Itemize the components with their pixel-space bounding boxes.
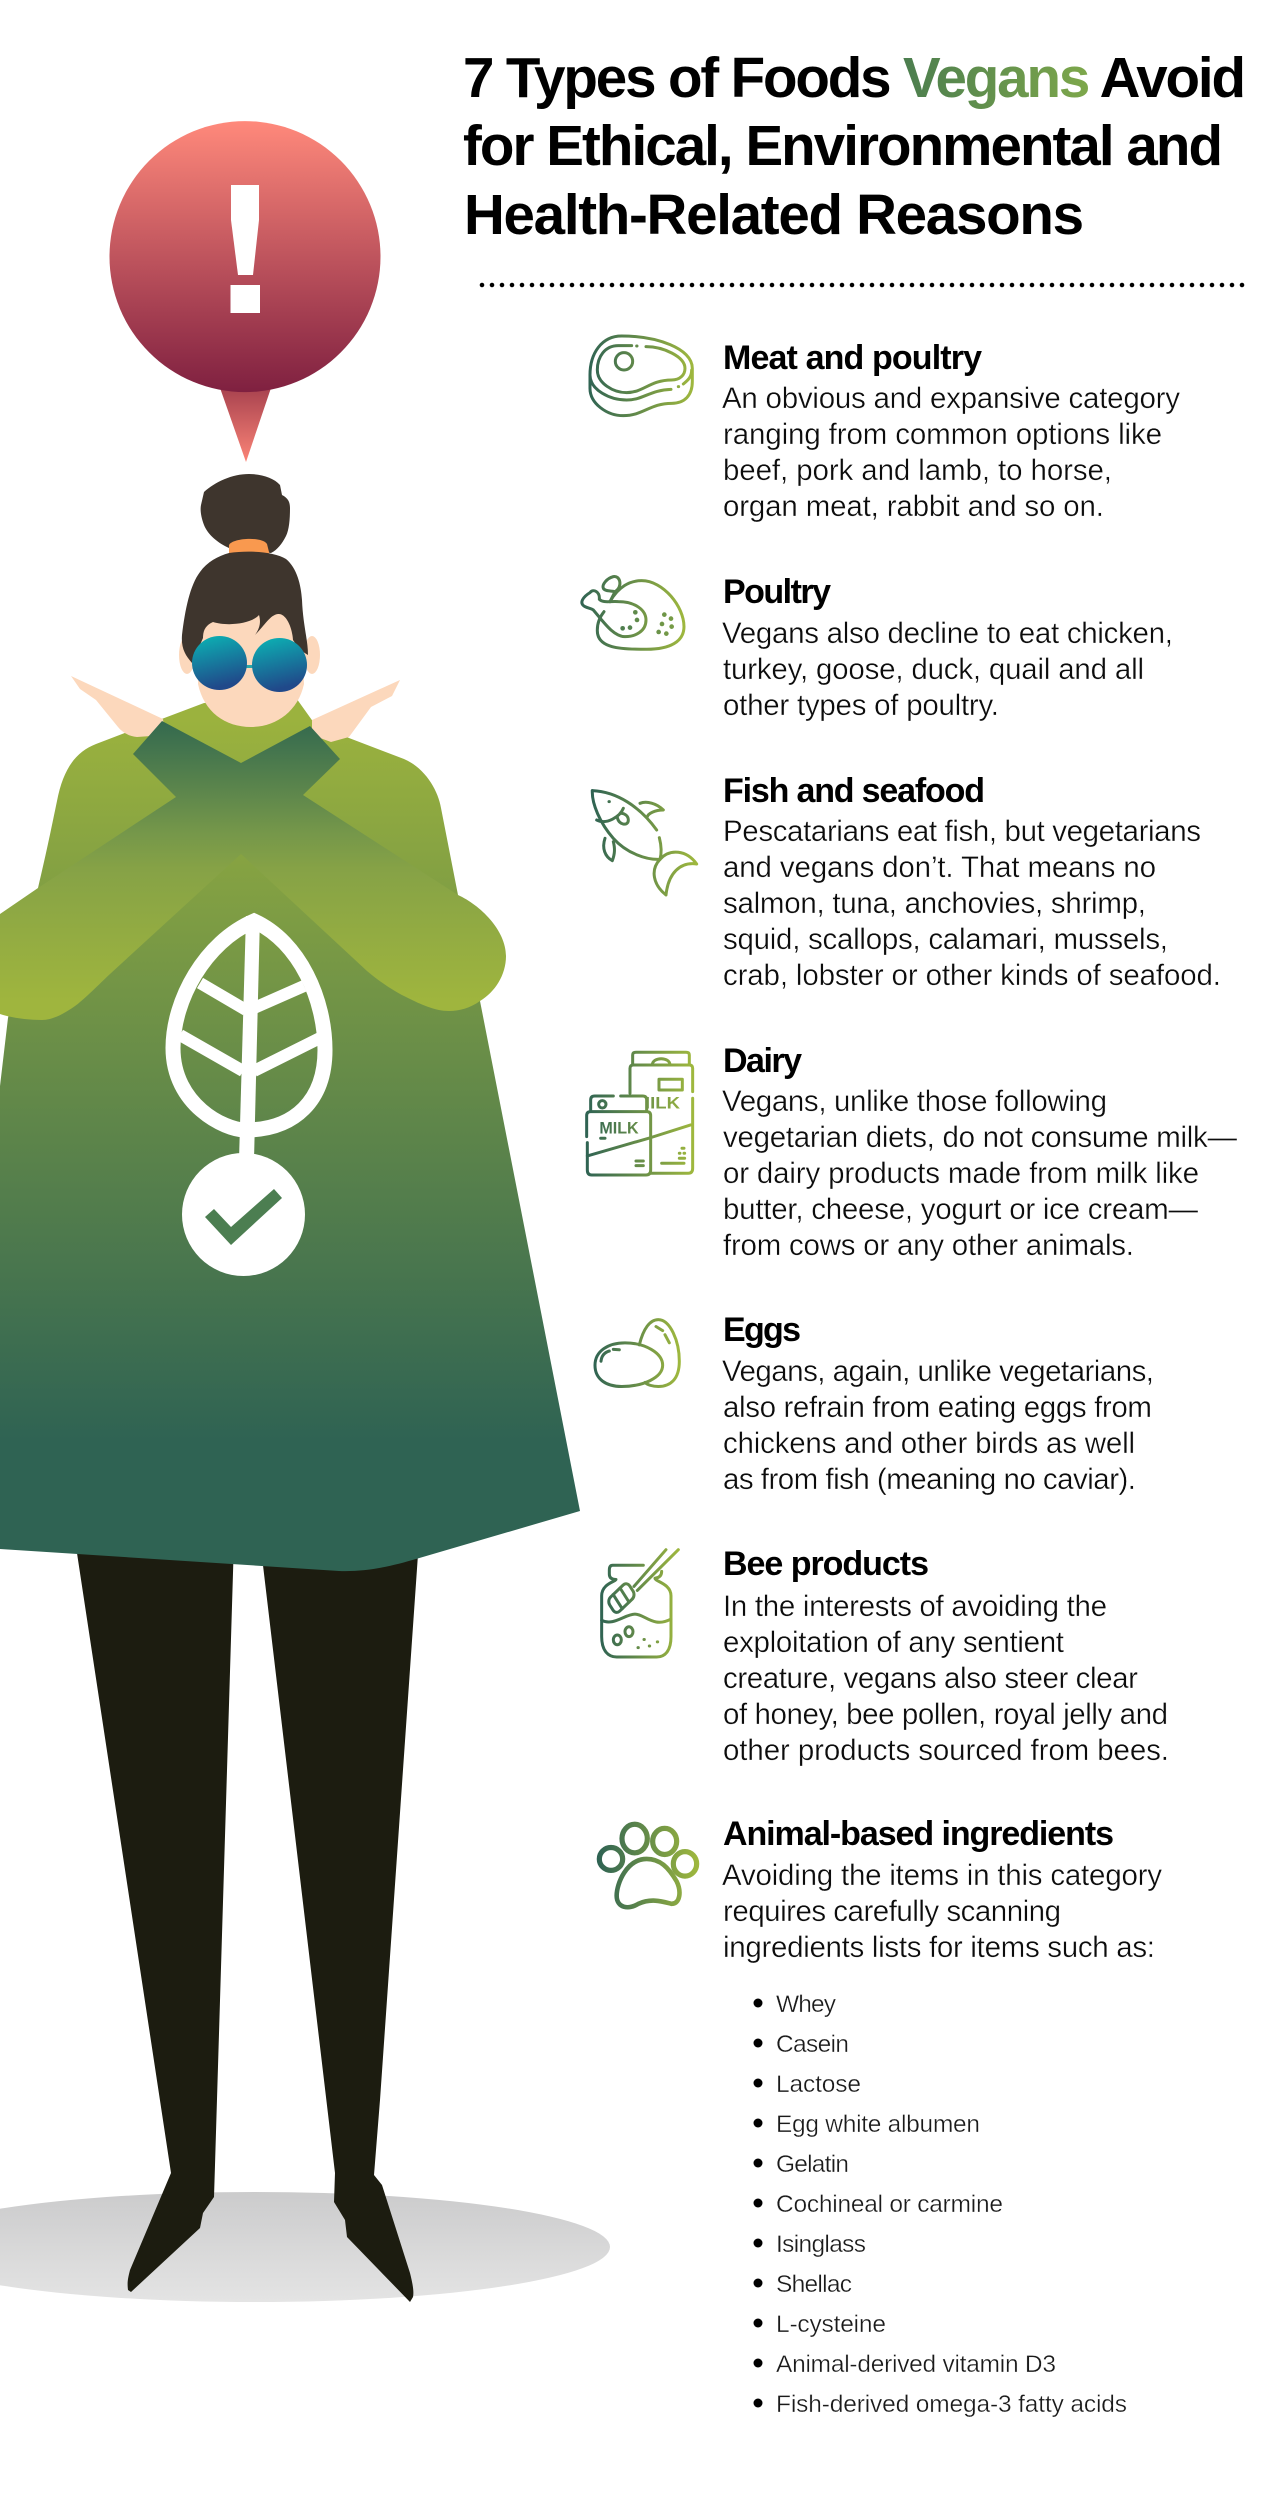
title [463,46,1246,246]
ingredients list: Shellac [776,2271,852,2298]
text: eggs: as from fish (meaning no caviar). [723,1463,1136,1496]
title: for Ethical, Environmental and [463,114,1223,177]
text: poultry: Vegans also decline to eat chicken, [722,617,1173,650]
text: poultry: other types of poultry. [723,689,999,722]
text: meat and poultry: organ meat, rabbit and so on. [723,490,1104,523]
text: bee products: In the interests of avoiding the [723,1590,1107,1623]
text: dairy [722,1085,1238,1262]
ingredients list: Egg white albumen [776,2111,980,2138]
icon: meat [590,336,692,416]
body cape [0,695,580,1571]
text: bee products [723,1590,1169,1767]
icon: milk cartons [587,1052,693,1175]
text: meat and poultry: beef, pork and lamb, to horse, [723,454,1112,487]
hair [182,552,308,663]
text: fish and seafood: Pescatarians eat fish, but vegetarians [723,815,1201,848]
heading: fish and seafood: Fish and seafood [723,772,985,810]
ingredients list: Whey [776,1991,837,2018]
icon: paw print [599,1824,697,1907]
heading: dairy: Dairy [723,1042,802,1080]
text: bee products: other products sourced from bees. [723,1734,1169,1767]
ingredients list: Casein [776,2031,849,2058]
icon: exclamation mark [230,185,260,313]
text: meat and poultry: An obvious and expansive category [722,382,1180,415]
crossed arms [0,721,506,1020]
ingredients list: L-cysteine [776,2311,886,2338]
dotted divider [482,283,1245,287]
heading: animal-based ingredients: Animal-based ingredients [723,1815,1114,1853]
ingredients list: Lactose [776,2071,861,2098]
text: dairy: Vegans, unlike those following [722,1085,1107,1118]
text: bee products: creature, vegans also steer clear [723,1662,1138,1695]
text: dairy: from cows or any other animals. [723,1229,1134,1262]
face [198,605,304,727]
text: fish and seafood: squid, scallops, calamari, mussels, [723,923,1168,956]
ears [179,636,320,674]
hair bun [201,474,290,553]
title: Health-Related Reasons [464,183,1084,246]
ingredients list: Gelatin [776,2151,849,2178]
text: bee products: of honey, bee pollen, royal jelly and [723,1698,1168,1731]
icon: milk cartons: MILK [599,1118,639,1137]
ground shadow [0,2192,610,2302]
text: animal-based ingredients: Avoiding the items in this category [722,1859,1162,1892]
speech balloon with exclamation mark [110,121,380,462]
text: dairy: vegetarian diets, do not consume milk— [723,1121,1238,1154]
ingredients list: Cochineal or carmine [776,2191,1003,2218]
icon: fish [592,791,697,895]
text: eggs [722,1355,1154,1496]
text: dairy: butter, cheese, yogurt or ice cream— [723,1193,1198,1226]
icon: poultry [582,576,684,649]
text: fish and seafood: crab, lobster or other kinds of seafood. [723,959,1221,992]
left hand [71,676,165,737]
text: dairy: or dairy products made from milk like [723,1157,1199,1190]
text: poultry [722,617,1173,722]
text: fish and seafood: and vegans don’t. That means no [723,851,1156,884]
illustration: person with crossed arms [0,474,580,2302]
text: poultry: turkey, goose, duck, quail and all [723,653,1144,686]
icon: eggs [595,1320,679,1386]
text: fish and seafood: salmon, tuna, anchovies, shrimp, [723,887,1146,920]
text: eggs: Vegans, again, unlike vegetarians, [722,1355,1154,1388]
text: fish and seafood [723,815,1221,992]
ingredients list: Fish-derived omega-3 fatty acids [776,2391,1127,2418]
text: meat and poultry: ranging from common options like [723,418,1162,451]
heading: meat and poultry: Meat and poultry [723,339,982,377]
hair tie [229,539,270,556]
ingredients list: Isinglass [776,2231,866,2258]
ingredients list [754,1991,1127,2418]
heading: poultry: Poultry [723,573,831,611]
text: animal-based ingredients: requires carefully scanning [723,1895,1061,1928]
heading: bee products: Bee products [723,1545,929,1583]
heading: eggs: Eggs [723,1311,801,1349]
right hand [312,680,400,742]
text: meat and poultry [722,382,1180,523]
title: 7 Types of Foods Vegans Avoid [463,46,1246,109]
text: animal-based ingredients [722,1859,1162,1964]
icon: milk cartons: MILK [635,1094,680,1113]
legs and shoes [75,1540,419,2302]
text: eggs: also refrain from eating eggs from [723,1391,1152,1424]
ingredients list: Animal-derived vitamin D3 [776,2351,1056,2378]
text: animal-based ingredients: ingredients lists for items such as: [723,1931,1155,1964]
text: eggs: chickens and other birds as well [723,1427,1135,1460]
icon: honey jar [602,1550,678,1657]
sunglasses [192,636,307,692]
text: bee products: exploitation of any sentient [723,1626,1064,1659]
icon: leaf with check badge [173,916,325,1276]
